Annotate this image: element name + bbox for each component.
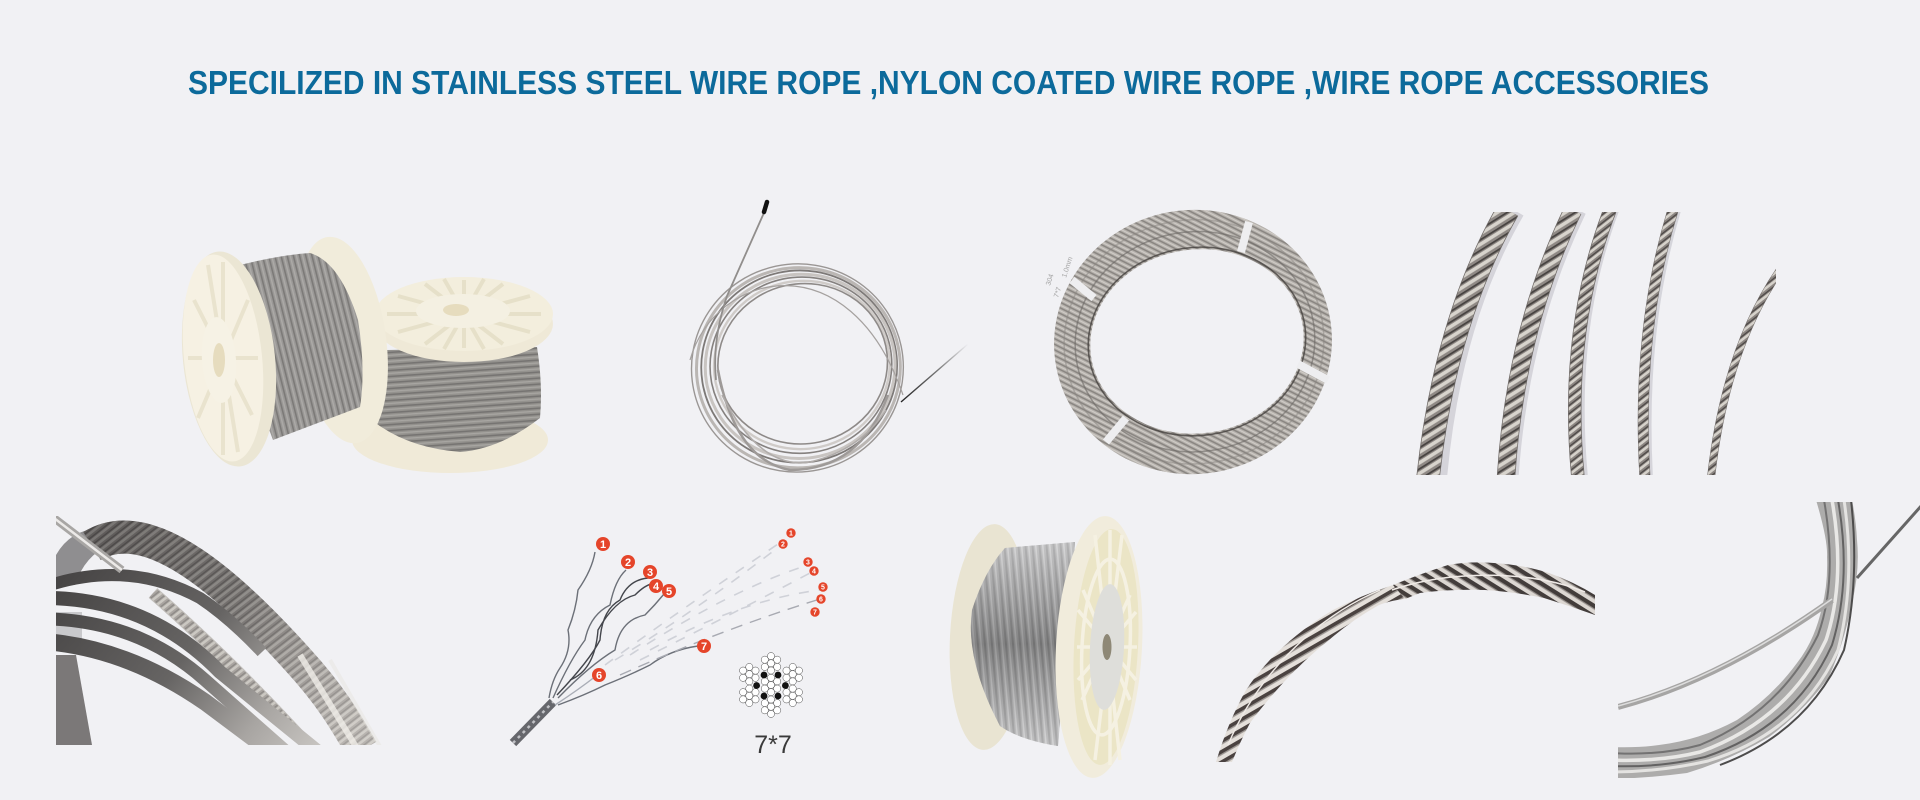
- numbered markers right: 1: [789, 530, 793, 538]
- tag lettering: [1045, 256, 1075, 299]
- photo: coiled wire rope bundle: [1610, 500, 1920, 779]
- photo: close-up of bent wire ropes: [50, 515, 382, 755]
- numbered markers left: 3: [647, 567, 653, 579]
- photo: wire rope coil with ties: [1037, 192, 1349, 492]
- right spool lying flat: [352, 277, 553, 473]
- photo: two white spools of wire rope: [172, 231, 553, 473]
- rope strands: [513, 552, 698, 743]
- cross section 7x7: [740, 652, 802, 718]
- dashed faded strands: [605, 540, 820, 665]
- numbered markers right: 4: [812, 568, 816, 576]
- title: SPECILIZED IN STAINLESS STEEL WIRE ROPE ,NYLON COATED WIRE ROPE ,WIRE ROPE ACCESSORIES: [188, 64, 1709, 101]
- wire tail: [901, 344, 968, 402]
- tag lettering: 7*7: [1053, 286, 1063, 299]
- numbered markers right: 2: [781, 542, 785, 548]
- photo: upright spool with silver wire: [944, 514, 1149, 780]
- numbered markers left: 5: [666, 586, 672, 598]
- dark lead wire: [1857, 505, 1920, 578]
- numbered markers left: 6: [596, 670, 602, 682]
- dark dashed strand: [620, 599, 820, 675]
- numbered markers right: 3: [806, 560, 810, 566]
- reel hub: [1087, 583, 1127, 711]
- photo: strand diagram with numbered wires: [513, 528, 828, 759]
- metal rod: [50, 515, 122, 570]
- rope shadows: [1436, 210, 1676, 478]
- photo: striped rope arc: [1216, 562, 1595, 762]
- numbered markers left: 7: [701, 641, 707, 653]
- numbered markers right: [778, 528, 828, 617]
- numbered markers left: 1: [600, 539, 606, 551]
- photo: thin wire coil with crimped end: [672, 202, 968, 492]
- numbered markers left: 4: [653, 581, 660, 593]
- photo: five rope diameters: [1428, 210, 1780, 478]
- left spool standing upright: [172, 231, 400, 471]
- tag lettering: 304: [1045, 273, 1056, 287]
- cable ties: [1072, 222, 1328, 442]
- 7*7 label: 7*7: [754, 731, 792, 759]
- numbered markers left: 2: [625, 557, 631, 569]
- numbered markers right: 5: [821, 584, 825, 592]
- numbered markers left: [592, 537, 711, 682]
- numbered markers right: 7: [813, 610, 817, 616]
- numbered markers right: 6: [819, 596, 823, 604]
- end ferrule: [764, 202, 767, 212]
- loose strand: [1618, 600, 1832, 707]
- tag lettering: 1.0mm: [1061, 256, 1075, 279]
